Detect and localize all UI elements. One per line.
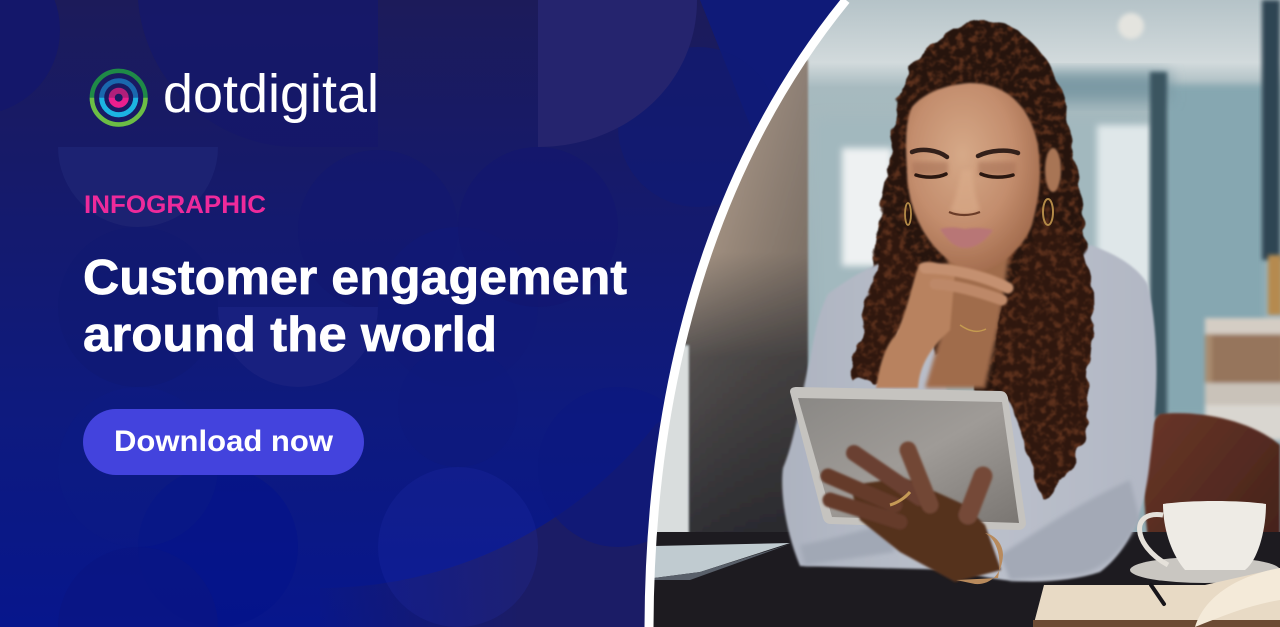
eyes — [916, 174, 946, 177]
window lower left — [657, 344, 690, 532]
ring — [890, 492, 910, 505]
panel: navy background with circles — [0, 0, 860, 627]
watch bracelet — [956, 533, 1003, 584]
raised hand and arm at chin — [876, 262, 1008, 388]
eyebrow label: INFOGRAPHIC — [84, 191, 266, 219]
table — [640, 532, 1280, 627]
neck and chest — [925, 250, 1010, 388]
nose — [949, 170, 980, 215]
button: download now — [83, 409, 364, 475]
button: download now: Download now — [114, 425, 334, 458]
lips — [940, 227, 993, 248]
title: Customer engagement — [83, 251, 627, 305]
coffee cup and saucer — [1130, 501, 1280, 583]
chair — [1143, 412, 1280, 532]
face — [905, 83, 1061, 272]
hair front curls — [994, 205, 1093, 498]
hand holding tablet — [828, 450, 1001, 582]
earrings — [905, 203, 911, 225]
hair back — [871, 19, 1089, 391]
logo — [92, 64, 379, 124]
eye shadow — [912, 162, 1016, 175]
white curved divider — [649, 0, 846, 627]
eyebrows — [912, 150, 947, 157]
title: around the world — [83, 308, 497, 362]
tablet — [790, 387, 1026, 530]
shelf and box — [1205, 255, 1280, 440]
necklace — [960, 325, 986, 331]
office background — [685, 0, 1280, 532]
photo: woman reading a tablet at a table — [640, 0, 1280, 627]
open book with pen — [1033, 568, 1280, 627]
logo wordmark: dotdigital — [163, 64, 379, 124]
shirt — [782, 245, 1156, 582]
notebook — [654, 543, 790, 580]
ear — [1045, 148, 1061, 192]
logo icon: concentric rings — [92, 71, 146, 124]
dark pillar — [685, 59, 810, 532]
